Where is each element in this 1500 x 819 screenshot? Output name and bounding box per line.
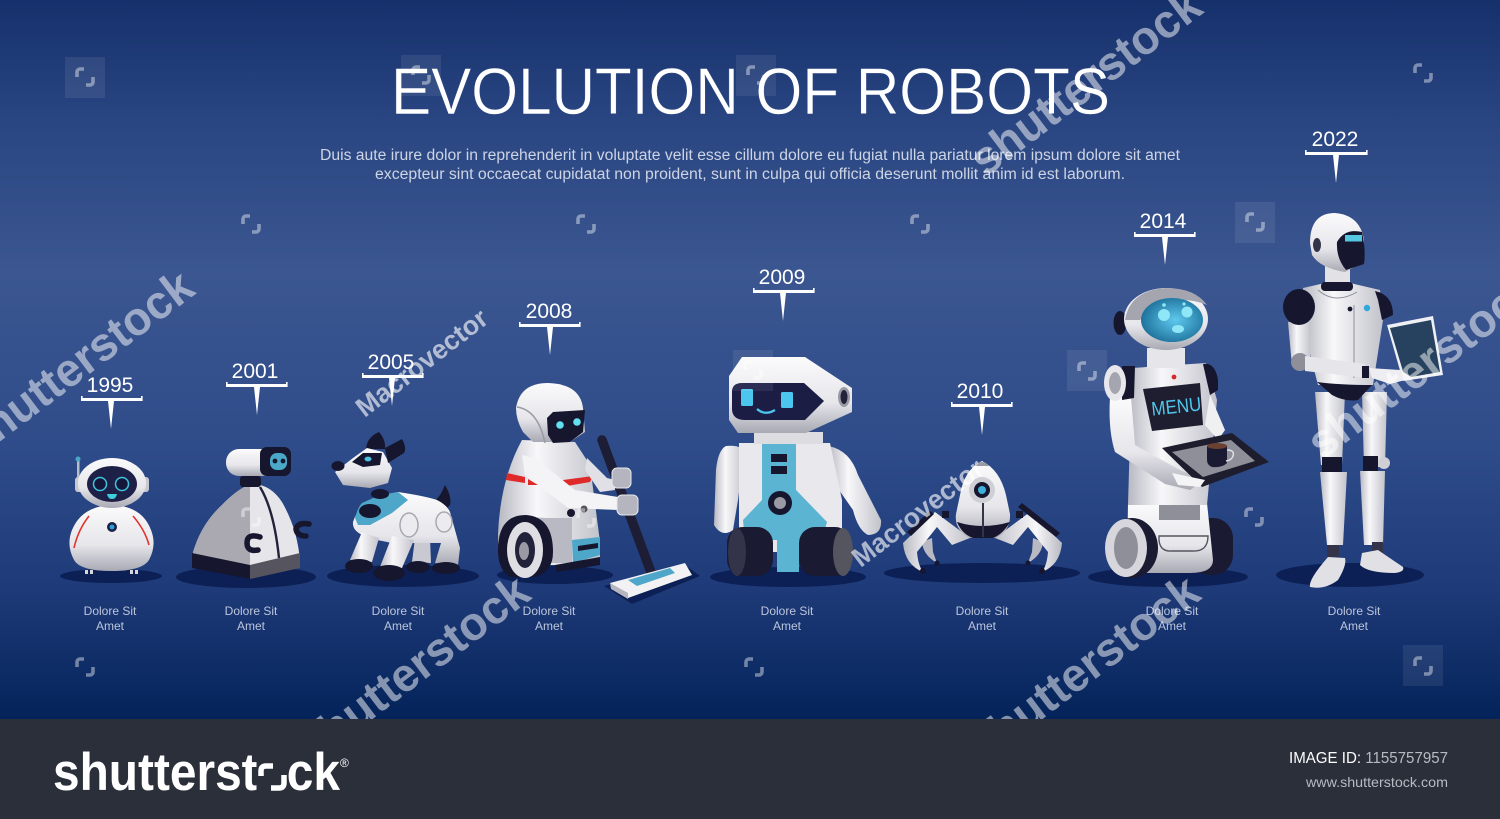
caption 2014: Amet (1158, 619, 1187, 633)
robot 2008 (497, 383, 700, 604)
chest button (768, 491, 792, 515)
body shade (192, 484, 250, 572)
pocket (1159, 536, 1208, 551)
red bands (506, 473, 593, 486)
year marker 2010: 2010 (957, 380, 1003, 403)
left arm (1110, 397, 1205, 490)
right ear (385, 439, 405, 463)
shadow 1995 (60, 569, 162, 583)
year marker 2022 (1305, 128, 1368, 183)
hip joints (400, 512, 452, 537)
left arm (522, 455, 618, 510)
registered mark: ® (340, 756, 349, 770)
shadow 2014 (1088, 567, 1248, 587)
torso (739, 443, 842, 552)
seam (982, 503, 984, 537)
base (1127, 503, 1213, 573)
caption 2022: Amet (1340, 619, 1369, 633)
caption 1995 (84, 604, 137, 633)
egg body (956, 461, 1010, 538)
shadow 2001 (176, 566, 316, 588)
hips (1317, 382, 1372, 400)
year marker 2010 (951, 380, 1013, 435)
head (335, 448, 392, 488)
caption 2001: Amet (237, 619, 266, 633)
right arm (1205, 395, 1225, 440)
tablet (1387, 316, 1443, 381)
claws (247, 524, 309, 550)
left wheel (1105, 518, 1158, 578)
saddle spot (359, 504, 381, 518)
robot 2009 (710, 357, 881, 587)
torso (1128, 363, 1217, 505)
caption 2014: Dolore Sit (1146, 604, 1199, 618)
caption 2005: Dolore Sit (372, 604, 425, 618)
visor light (1345, 235, 1362, 242)
caption 2014 (1146, 604, 1199, 633)
belly (957, 522, 1010, 538)
caption 2001: Dolore Sit (225, 604, 278, 618)
title: EVOLUTION OF ROBOTS (391, 54, 1110, 128)
year marker 1995: 1995 (87, 374, 133, 397)
shutterstock logo: shutterstock (53, 743, 340, 802)
chest seam (1318, 290, 1357, 378)
head (729, 357, 852, 433)
cup (1207, 443, 1233, 467)
head (75, 458, 149, 508)
menu screen: MENU (1150, 393, 1202, 421)
body (69, 505, 154, 571)
watermark text: Macrovector (846, 453, 990, 573)
head (516, 383, 585, 442)
caption 2008: Dolore Sit (523, 604, 576, 618)
watermark text: shutterstock (957, 563, 1210, 771)
year marker 2009: 2009 (759, 266, 805, 289)
right legs (995, 503, 1062, 574)
left leg (1310, 392, 1347, 588)
robot 2001 (176, 447, 316, 588)
body (353, 492, 460, 565)
neck (754, 432, 823, 444)
far leg (412, 538, 431, 563)
lower grey wrap (498, 518, 572, 563)
caption 2008 (523, 604, 576, 633)
ear (1114, 311, 1126, 335)
robot 2005 (327, 432, 479, 587)
caption 2005 (372, 604, 425, 633)
collar (371, 489, 389, 499)
neck (1147, 348, 1185, 368)
elbow (1291, 353, 1309, 371)
shadow 2005 (327, 565, 479, 587)
chest lights (1348, 305, 1370, 311)
mouth (107, 494, 117, 499)
wrist (1362, 366, 1369, 378)
eye (969, 477, 995, 503)
dots (567, 506, 588, 517)
side lens (838, 387, 850, 407)
feet (345, 559, 460, 581)
mop shadow (604, 565, 700, 604)
logo bracket o (256, 760, 288, 793)
robot 1995 (60, 456, 162, 583)
shadow 2022 (1276, 563, 1424, 587)
shadow 2010 (884, 563, 1080, 583)
collar (1321, 282, 1353, 291)
lower panel (572, 537, 600, 563)
eyes (741, 389, 793, 408)
chest bars (771, 454, 787, 474)
year marker 2008 (519, 300, 581, 355)
left arm (1288, 322, 1311, 366)
year marker 2008: 2008 (526, 300, 572, 323)
left arm (714, 446, 744, 533)
description text: excepteur sint occaecat cupidatat non proident, sunt in culpa qui officia deserunt mollit anim id est laborum. (375, 166, 1125, 183)
forearm (1305, 356, 1368, 378)
hand (1172, 473, 1205, 487)
caption 1995: Amet (96, 619, 125, 633)
torso (1303, 283, 1383, 385)
watermark text: Macrovector (350, 303, 494, 423)
shadow 2009 (710, 567, 866, 587)
year marker 2009 (753, 266, 815, 321)
menu screen (1143, 383, 1203, 431)
red straps (74, 516, 149, 548)
image id: IMAGE ID: 1155757957 (1289, 750, 1448, 767)
eyes (94, 478, 128, 490)
red dot (1172, 375, 1176, 379)
shadow 2008 (497, 566, 613, 584)
ear (1313, 238, 1321, 252)
base (555, 557, 600, 572)
caption 2010: Amet (968, 619, 997, 633)
year marker 2022: 2022 (1312, 128, 1358, 151)
head (226, 449, 286, 476)
top cap (975, 462, 989, 466)
left shoulder (1283, 289, 1315, 325)
nose (332, 461, 344, 471)
year marker 2014 (1134, 210, 1196, 265)
head (1124, 288, 1208, 350)
caption 2010 (956, 604, 1009, 633)
wheel (498, 515, 553, 578)
caption 2009 (761, 604, 814, 633)
watermark text: shutterstock (287, 563, 540, 771)
blue saddle (355, 492, 408, 525)
head (1310, 213, 1364, 272)
right shoulder (1203, 364, 1218, 395)
panel slot (578, 543, 598, 551)
visor (1141, 298, 1203, 342)
right arm (828, 446, 881, 535)
smile (757, 409, 775, 413)
right shoulder (1375, 291, 1393, 320)
caption 2022: Dolore Sit (1328, 604, 1381, 618)
year marker 2005: 2005 (368, 351, 414, 374)
caption 2009: Amet (773, 619, 802, 633)
head seam (517, 407, 545, 443)
visor (732, 383, 824, 420)
front legs (350, 532, 414, 568)
face lights (1158, 302, 1192, 333)
wheels (727, 527, 853, 576)
hand (1369, 368, 1413, 384)
year marker 2001 (226, 360, 288, 415)
left shoulder (1104, 365, 1135, 401)
caption 2009: Dolore Sit (761, 604, 814, 618)
left legs (903, 511, 970, 574)
chest light (107, 522, 117, 532)
base panel (1159, 503, 1200, 520)
mop stick (602, 440, 652, 575)
robot 2014 (1088, 288, 1269, 587)
face (260, 447, 291, 476)
teal panel (743, 442, 827, 572)
face (1337, 231, 1365, 270)
right arm (585, 458, 615, 492)
eye patch (352, 453, 382, 467)
tray (1162, 433, 1269, 487)
right leg (1360, 392, 1403, 573)
description text (320, 147, 1181, 183)
neck (1325, 265, 1350, 289)
robot 2010 (884, 461, 1080, 583)
caption 2005: Amet (384, 619, 413, 633)
description text: Duis aute irure dolor in reprehenderit in voluptate velit esse cillum dolore eu fugiat nulla pariatur lorem ipsum dolore sit amet (320, 147, 1181, 164)
caption 2001 (225, 604, 278, 633)
year marker 2005 (362, 351, 424, 406)
mop head (610, 563, 692, 599)
caption 2008: Amet (535, 619, 564, 633)
ears (366, 432, 385, 449)
caption 1995: Dolore Sit (84, 604, 137, 618)
right wheel (1190, 518, 1233, 575)
footer bar (0, 719, 1500, 819)
seam (260, 487, 279, 558)
body (498, 440, 600, 565)
head top (1125, 288, 1207, 320)
caption 2010: Dolore Sit (956, 604, 1009, 618)
robot 2022 (1276, 213, 1443, 588)
watermark icons (65, 55, 1443, 686)
caption 2022 (1328, 604, 1381, 633)
face (547, 410, 585, 443)
antenna (76, 456, 80, 481)
neck (240, 476, 261, 487)
year marker 2014: 2014 (1140, 210, 1187, 233)
website: www.shutterstock.com (1305, 774, 1448, 790)
year marker 2001: 2001 (232, 360, 278, 383)
tail (436, 485, 450, 508)
base band (192, 553, 300, 579)
feet (85, 570, 138, 574)
year marker 1995 (81, 374, 143, 429)
cone body (192, 484, 300, 572)
hands (612, 468, 638, 515)
